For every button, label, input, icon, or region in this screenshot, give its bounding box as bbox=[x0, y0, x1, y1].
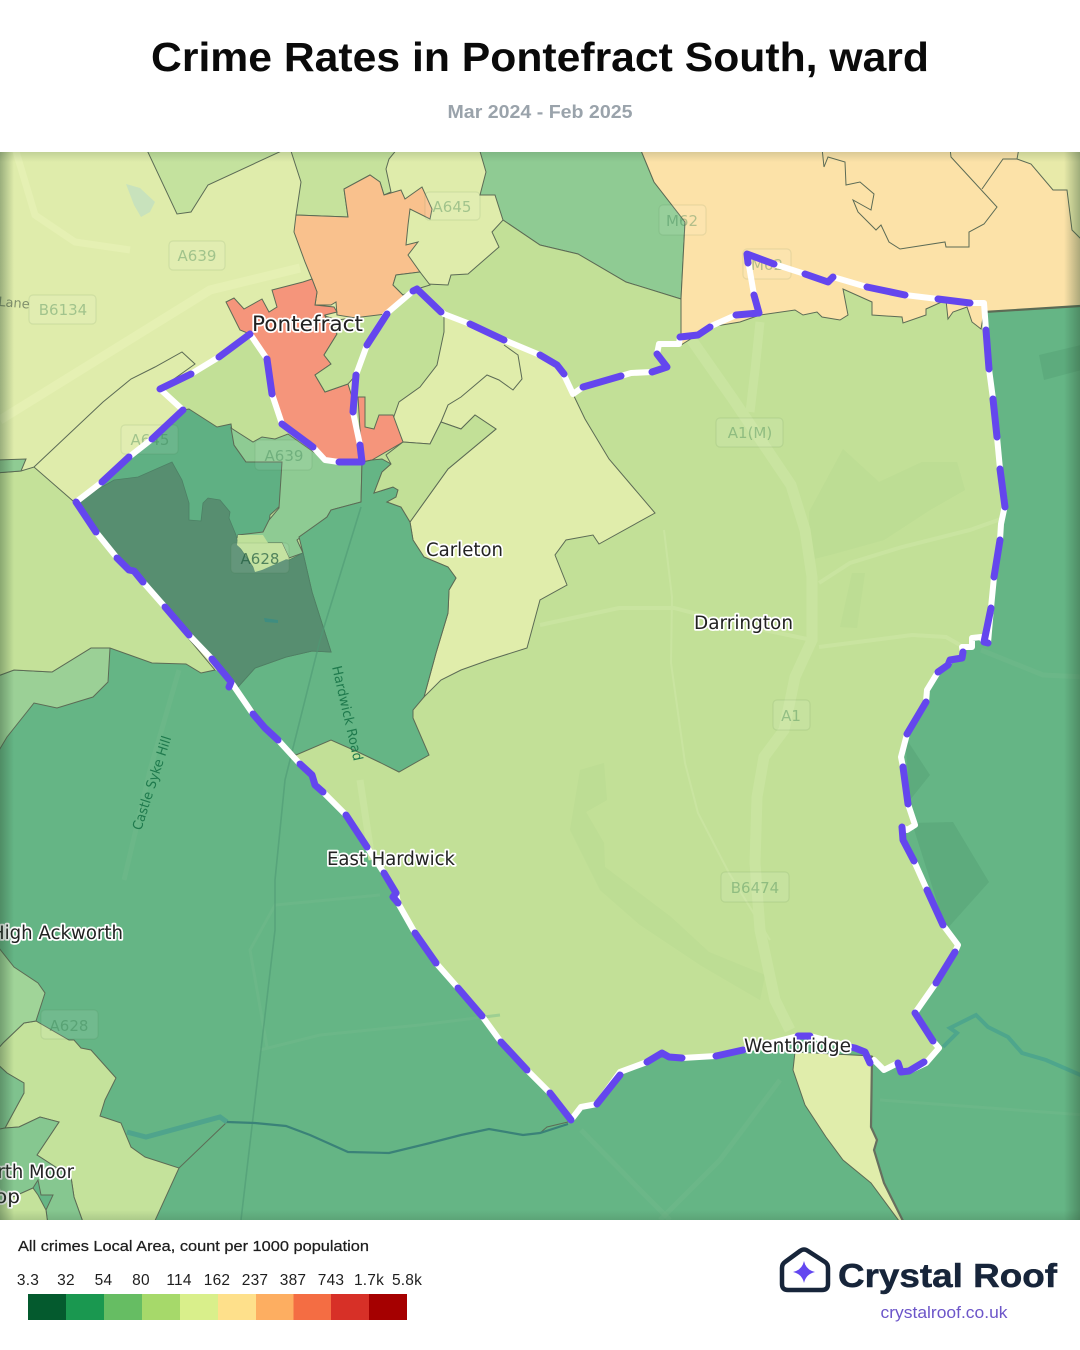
area: lighter mid-green bbox=[231, 428, 362, 558]
lines: outer district borders bbox=[34, 352, 568, 1168]
place label: Pontefract: Pontefract bbox=[252, 312, 363, 337]
area: western light green bbox=[0, 467, 215, 677]
road label: A1(M) bbox=[716, 418, 783, 447]
area: north-east mid green bbox=[479, 148, 685, 299]
legend scale values: 5.8k bbox=[392, 1272, 422, 1289]
road label: M62 east: M62 bbox=[751, 256, 783, 274]
place label: Carleton: Carleton bbox=[426, 540, 503, 561]
road label: B6474: B6474 bbox=[731, 879, 779, 897]
area: Hardwick green bbox=[231, 459, 456, 772]
ward boundary bbox=[76, 254, 1005, 1120]
road label: A628 south-west: A628 bbox=[50, 1017, 88, 1035]
area: salmon Pontefract centre bbox=[226, 279, 362, 462]
logo: Crystal Roof bbox=[782, 1250, 1058, 1322]
legend scale values: 162 bbox=[204, 1272, 230, 1289]
choropleth map bbox=[0, 148, 1080, 1225]
icon: house with star bbox=[782, 1250, 828, 1290]
boundary: purple dashes bbox=[76, 254, 1005, 1120]
area: south-west yellow-green bbox=[0, 1021, 179, 1225]
road label: A645 north: A645 bbox=[433, 198, 471, 216]
road label: A645 south bbox=[121, 425, 178, 454]
road label: A639 north bbox=[169, 241, 225, 270]
road label: A639 south bbox=[255, 440, 312, 470]
area: orange town centre bbox=[294, 175, 432, 325]
road label: A639 north: A639 bbox=[178, 247, 216, 265]
title: Crime Rates in Pontefract South, ward bbox=[151, 34, 929, 80]
area: Pale green patch east of Hardwick bbox=[374, 415, 496, 522]
area: M62 pale yellow district bbox=[640, 148, 1080, 345]
website url: crystalroof.co.uk bbox=[880, 1304, 1008, 1322]
legend scale values: 54 bbox=[95, 1272, 112, 1289]
patches: darker fields bbox=[570, 449, 965, 1000]
road label: A1(M): A1(M) bbox=[728, 424, 772, 442]
railway line bbox=[241, 507, 361, 1220]
legend colour bar bbox=[28, 1294, 407, 1320]
place label: Darrington: Darrington bbox=[694, 613, 793, 634]
road label: A1: A1 bbox=[781, 707, 801, 725]
legend scale values: 743 bbox=[318, 1272, 344, 1289]
area: small green by junction bbox=[393, 272, 430, 295]
area: mid-green north of dark zone bbox=[98, 408, 282, 538]
road label: A628 south-west bbox=[41, 1010, 98, 1039]
area: Pontefract South ward fill bbox=[166, 290, 1002, 1115]
legend scale values: 3.3 bbox=[17, 1272, 39, 1289]
roads inside ward bbox=[360, 322, 1001, 1030]
lake bbox=[126, 184, 155, 217]
legend scale values bbox=[17, 1272, 422, 1289]
roads and fields on green bbox=[268, 1014, 668, 1216]
road label: A645 north bbox=[425, 192, 480, 220]
legend title: All crimes Local Area, count per 1000 population bbox=[18, 1238, 369, 1255]
area: small green sliver bbox=[0, 459, 26, 473]
legend scale values: 237 bbox=[242, 1272, 268, 1289]
area: pale pocket at A628 bbox=[237, 535, 289, 572]
road label: A628: A628 bbox=[241, 550, 279, 568]
street label: Castle Syke Hill: Castle Syke Hill bbox=[130, 734, 175, 832]
boundary: white casing bbox=[76, 254, 1005, 1120]
road label: A628 bbox=[231, 543, 289, 573]
area: central north green bbox=[417, 220, 681, 394]
legend scale values: 80 bbox=[132, 1272, 150, 1289]
area: north-east corner pale bbox=[1017, 148, 1080, 243]
area: Carleton pale yellow bbox=[393, 314, 655, 697]
legend scale values: 114 bbox=[166, 1272, 192, 1289]
road label: B6134: B6134 bbox=[39, 301, 87, 319]
pond bbox=[264, 618, 278, 623]
road label: A639 south: A639 bbox=[265, 447, 303, 465]
area: south-west green pockets bbox=[0, 1062, 24, 1130]
road label: A645 south: A645 bbox=[131, 431, 169, 449]
subtitle: date range: Mar 2024 - Feb 2025 bbox=[448, 102, 632, 122]
area: north-west green bbox=[147, 152, 280, 214]
road label: B6474 bbox=[721, 872, 789, 902]
legend scale values: 387 bbox=[280, 1272, 306, 1289]
road label: M62 east bbox=[743, 249, 791, 279]
place label: Wentbridge: Wentbridge bbox=[744, 1036, 851, 1057]
road label: M62 west bbox=[659, 205, 706, 235]
logo wordmark: Crystal Roof bbox=[838, 1257, 1058, 1294]
river: River Went west bbox=[127, 1117, 568, 1153]
road label: M62 west: M62 bbox=[666, 212, 698, 230]
area: salmon eastern part bbox=[358, 397, 403, 462]
area: west pale green bbox=[0, 943, 45, 1052]
river: River Went east bbox=[943, 1015, 1080, 1077]
area: Wentbridge pale yellow bbox=[793, 1052, 905, 1225]
area: north central green bbox=[290, 148, 398, 217]
area: darkest green district bbox=[76, 462, 331, 687]
road label: A1 bbox=[773, 700, 810, 730]
area: mid-green strip west bbox=[0, 648, 110, 757]
street label: Hardwick Road: Hardwick Road bbox=[328, 664, 366, 762]
legend scale values: 32 bbox=[57, 1272, 75, 1289]
road label: B6134 bbox=[29, 295, 96, 324]
area: green pocket next to centre bbox=[315, 314, 386, 392]
area: southern green districts bbox=[0, 306, 1080, 1225]
legend bbox=[17, 1238, 422, 1320]
legend scale values: 1.7k bbox=[354, 1272, 384, 1289]
place label: East Hardwick: East Hardwick bbox=[327, 849, 455, 870]
